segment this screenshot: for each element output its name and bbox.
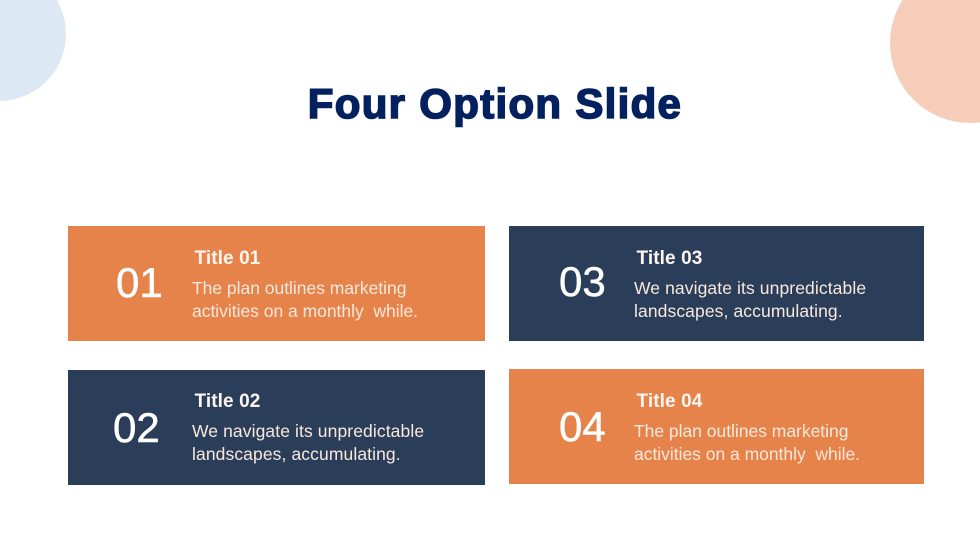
text: option 03 description: landscapes, accumulating. xyxy=(634,301,843,321)
text: option 02 description: We navigate its unpredictable xyxy=(192,421,424,441)
text: option 01 description: activities on a monthly while. xyxy=(192,301,418,321)
number 02: 02 xyxy=(113,404,160,451)
title: Four Option Slide xyxy=(308,80,682,127)
panel: option 04 xyxy=(509,369,924,484)
decorative circle: top right xyxy=(890,0,980,123)
panel: option 02 xyxy=(68,370,485,485)
text: option 04 description: activities on a monthly while. xyxy=(634,444,860,464)
text: option 01 description xyxy=(192,278,418,321)
number 01: 01 xyxy=(116,259,163,306)
text: option 04 description: The plan outlines marketing xyxy=(634,421,848,441)
heading: Title 02: Title 02 xyxy=(194,391,260,412)
number 03: 03 xyxy=(559,258,606,305)
text: option 02 description xyxy=(192,421,424,464)
heading: Title 01: Title 01 xyxy=(194,248,260,269)
decorative circle: top left xyxy=(0,0,66,101)
panel: option 01 xyxy=(68,226,485,341)
number 04: 04 xyxy=(559,403,606,450)
text: option 01 description: The plan outlines marketing xyxy=(192,278,406,298)
heading: Title 03: Title 03 xyxy=(636,248,702,269)
text: option 03 description: We navigate its unpredictable xyxy=(634,278,866,298)
text: option 03 description xyxy=(634,278,866,321)
text: option 02 description: landscapes, accumulating. xyxy=(192,444,401,464)
panel: option 03 xyxy=(509,226,924,341)
text: option 04 description xyxy=(634,421,860,464)
heading: Title 04: Title 04 xyxy=(636,391,702,412)
